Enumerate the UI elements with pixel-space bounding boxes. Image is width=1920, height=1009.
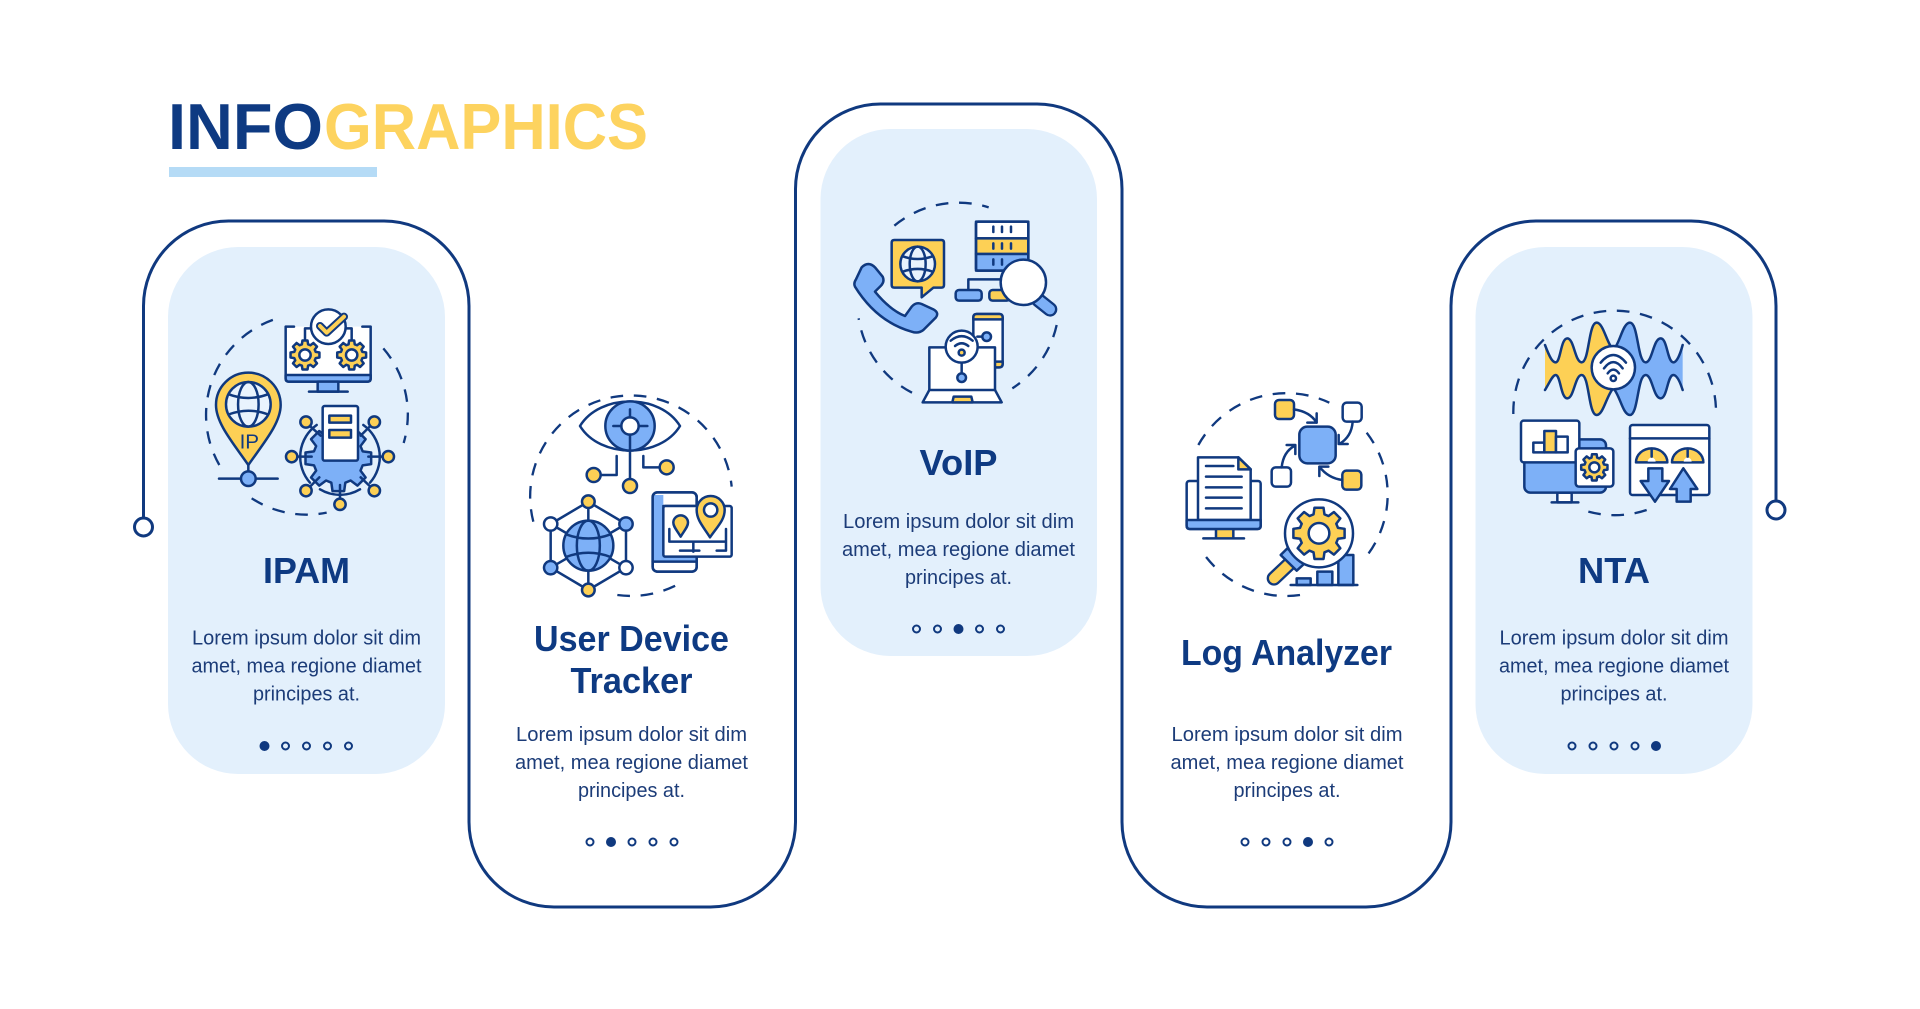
- panel: NTA background: [1476, 247, 1752, 774]
- pagination dots: NTA: [1568, 742, 1660, 750]
- title: GRAPHICS: [324, 90, 648, 163]
- text: NTA description: Lorem ipsum dolor sit dim: [1500, 628, 1728, 650]
- text: IPAM description: Lorem ipsum dolor sit dim: [192, 628, 421, 650]
- text: Log Analyzer description: principes at.: [1234, 780, 1340, 802]
- heading: IPAM: IPAM: [263, 550, 350, 591]
- heading: VoIP: VoIP: [920, 442, 998, 483]
- icon: Log Analyzer: [1187, 393, 1388, 596]
- heading: NTA: NTA: [1578, 550, 1650, 591]
- sound wave with wifi: [1545, 323, 1683, 415]
- text: NTA description: principes at.: [1560, 684, 1668, 706]
- text: User Device Tracker description: principes at.: [578, 780, 685, 802]
- pagination dots: VoIP: [913, 625, 1004, 633]
- flow diagram: [1272, 400, 1362, 490]
- telephone handset: [854, 264, 937, 333]
- text: VoIP description: [842, 511, 1075, 589]
- text: Log Analyzer description: amet, mea regione diamet: [1170, 752, 1404, 774]
- server with magnifier: [956, 222, 1050, 309]
- icon: VoIP: [854, 203, 1057, 402]
- speech bubble with globe: [892, 240, 944, 297]
- panel: IPAM background: [168, 247, 445, 774]
- text: VoIP description: amet, mea regione diamet: [842, 539, 1075, 561]
- folder chart on monitor: [1521, 421, 1613, 502]
- text: User Device Tracker description: [515, 724, 748, 802]
- icon: NTA: [1513, 311, 1716, 515]
- text: IPAM description: principes at.: [253, 684, 360, 706]
- pagination dots: User Device Tracker: [586, 838, 678, 846]
- server gear network: [286, 406, 394, 510]
- heading: User Device Tracker: User Device: [534, 618, 729, 659]
- laptop and phone with wifi: [923, 314, 1003, 402]
- globe network: [544, 495, 633, 596]
- title: INFO: [168, 90, 323, 163]
- IP location pin: [216, 373, 281, 486]
- text: VoIP description: Lorem ipsum dolor sit dim: [843, 511, 1074, 533]
- monitor with gears: [286, 309, 371, 392]
- IP location pin: IP: [240, 430, 259, 453]
- text: IPAM description: [192, 628, 422, 706]
- text: Log Analyzer description: [1170, 724, 1404, 802]
- heading: Log Analyzer: Log Analyzer: [1181, 632, 1392, 673]
- text: Log Analyzer description: Lorem ipsum dolor sit dim: [1172, 724, 1402, 746]
- text: IPAM description: amet, mea regione diamet: [192, 656, 422, 678]
- panel: VoIP background: [820, 129, 1097, 656]
- text: User Device Tracker description: amet, mea regione diamet: [515, 752, 748, 774]
- heading: User Device Tracker: [534, 618, 729, 701]
- title: [168, 90, 648, 163]
- text: NTA description: [1499, 628, 1729, 706]
- pagination dots: Log Analyzer: [1242, 838, 1332, 846]
- speed gauges window: [1630, 425, 1709, 502]
- icon: IPAM: [206, 309, 408, 515]
- connecting outline: [134, 104, 1785, 907]
- text: NTA description: amet, mea regione diamet: [1499, 656, 1729, 678]
- magnifier with gear and bars: [1274, 499, 1357, 585]
- pagination dots: IPAM: [260, 742, 352, 750]
- icon: User Device Tracker: [530, 395, 732, 596]
- text: User Device Tracker description: Lorem ipsum dolor sit dim: [516, 724, 747, 746]
- eye: [580, 401, 680, 493]
- phone with map: [653, 492, 732, 572]
- monitor with document: [1187, 457, 1261, 538]
- title underline: [169, 167, 377, 177]
- heading: User Device Tracker: Tracker: [570, 660, 692, 701]
- text: VoIP description: principes at.: [905, 567, 1012, 589]
